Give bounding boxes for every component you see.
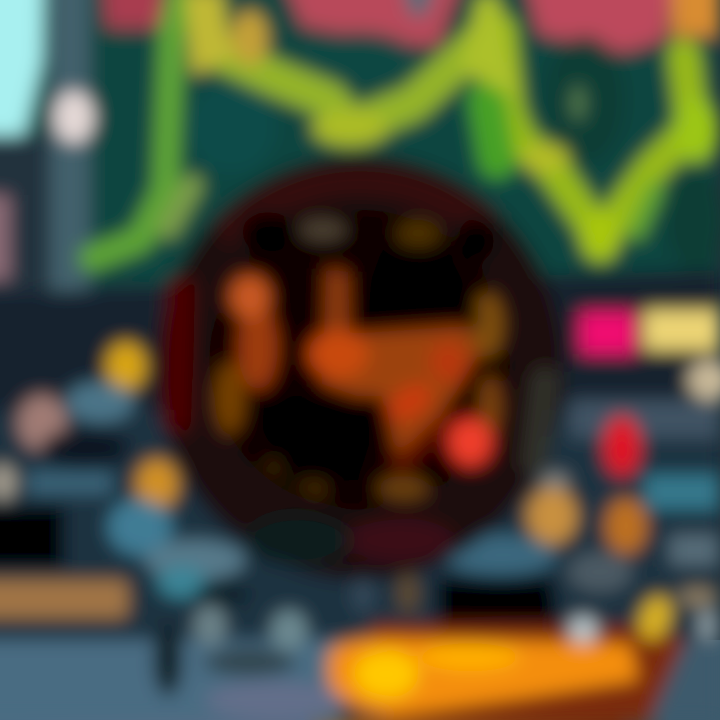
- chart: red band right: [516, 0, 684, 52]
- lamp: white blob: [54, 91, 94, 143]
- street: right patches: [541, 400, 720, 641]
- globe: maroon left edge: [176, 290, 180, 420]
- globe: dark red streak: [395, 416, 452, 470]
- traffic light: red: [604, 416, 640, 476]
- globe: outer disc and rim: [156, 156, 564, 580]
- globe: orange continents: [230, 268, 480, 456]
- globe: lower maroon: [346, 518, 454, 562]
- chart: red band centre: [268, 0, 476, 46]
- background: road right: [650, 640, 720, 720]
- chart: green zigzag line: [92, 0, 693, 258]
- chart: teal patches: [96, 32, 720, 270]
- globe: maroon top arc: [220, 180, 490, 235]
- globe: bright red spot: [448, 418, 492, 466]
- chart: grey top gaps: [392, 0, 448, 16]
- side panel: pale pink left edge: [0, 195, 10, 280]
- background: mid dark band: [0, 270, 720, 410]
- background: chart field: [0, 0, 720, 285]
- base: yellow corner accent: [633, 591, 677, 645]
- window glow: top left: [0, 0, 44, 135]
- chart: orange corner: [672, 0, 720, 36]
- base: orange body: [328, 638, 638, 716]
- sign: pink block: [580, 312, 636, 354]
- globe: lower teal shade: [246, 514, 350, 566]
- globe: amber inner marks: [215, 219, 503, 500]
- base: glowing yellow-orange slab: [328, 591, 686, 720]
- sign: cream block: [644, 310, 720, 350]
- chart: red band left: [100, 0, 165, 28]
- background: road left: [0, 640, 340, 720]
- base: pale highlight: [569, 616, 597, 644]
- globe: black land shadows: [356, 244, 484, 324]
- background: road purple: [205, 682, 345, 718]
- sign: cream blob: [688, 360, 720, 400]
- base: bright yellow highlights: [354, 650, 418, 698]
- chart: yellow peak highlights: [184, 0, 718, 262]
- globe: dark inner disc: [210, 210, 510, 510]
- street: left vehicles and shapes: [0, 382, 307, 696]
- background: base edge colours: [0, 640, 720, 720]
- globe: grey right edge: [535, 380, 545, 462]
- background: dark left side: [0, 135, 50, 315]
- street: right car: [352, 535, 558, 624]
- background: grey column: [50, 0, 90, 300]
- lights: amber blobs: [0, 342, 647, 554]
- base: dark brown shadow: [370, 624, 686, 720]
